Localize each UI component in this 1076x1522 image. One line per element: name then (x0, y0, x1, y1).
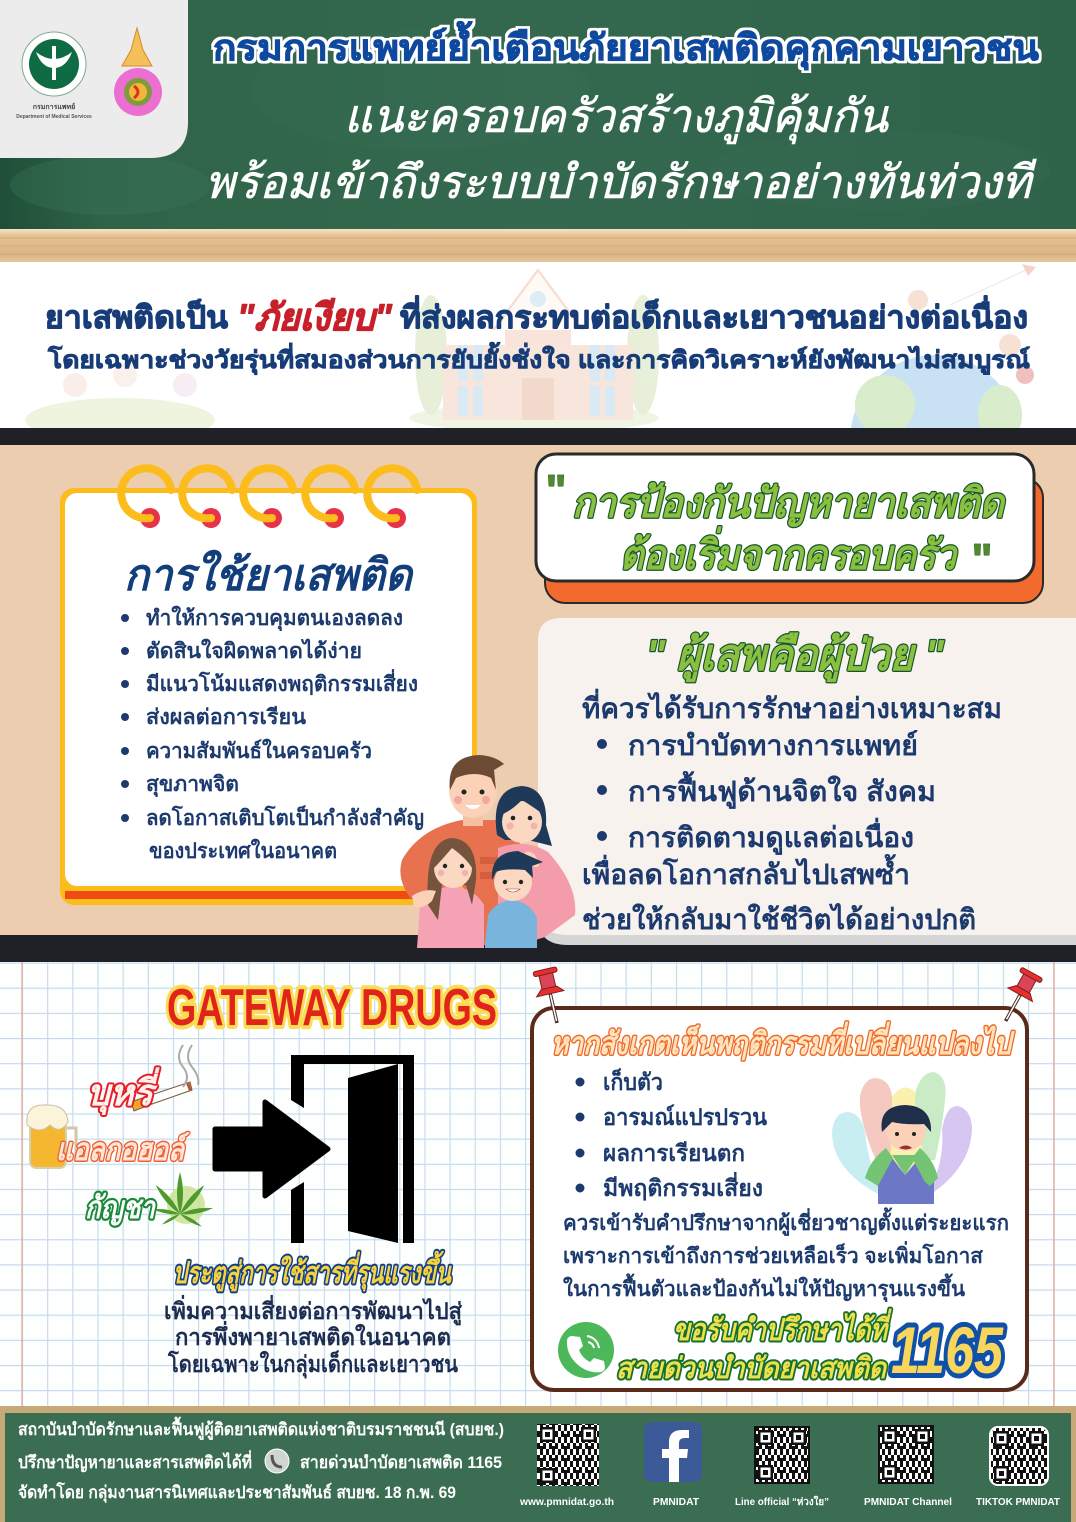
risk text: เพิ่มความเสี่ยงต่อการพัฒนาไปสู่ (164, 1294, 463, 1326)
advice text: ควรเข้ารับคำปรึกษาจากผู้เชี่ยวชาญตั้งแต่ระยะแรก (563, 1207, 1009, 1237)
icon: cannabis and label: กัญชา (85, 1190, 156, 1226)
icon: footer phone (265, 1449, 289, 1473)
intro band (0, 262, 1076, 525)
mother (496, 786, 575, 945)
callout: prevention quote: " (972, 535, 992, 584)
callout: prevention quote: การป้องกันปัญหายาเสพติด (572, 480, 1006, 527)
callout: prevention quote: ต้องเริ่มจากครอบครัว (620, 526, 959, 578)
qr: website (519, 1424, 614, 1508)
wood shelf (0, 229, 1076, 262)
hotline number: 1165 (891, 1313, 1004, 1387)
daughter (412, 838, 484, 948)
patient text (582, 688, 1002, 935)
door caption: ประตูสู่การใช้สารที่รุนแรงขึ้น (173, 1250, 452, 1292)
patient text: การฟื้นฟูด้านจิตใจ สังคม (628, 770, 936, 809)
father (400, 755, 520, 945)
notepad list: ทำให้การควบคุมตนเองลดลง (146, 605, 403, 632)
behaviour list: มีพฤติกรรมเสี่ยง (603, 1171, 763, 1201)
title (205, 21, 1039, 208)
illustration: anxious child (832, 1072, 972, 1204)
notepad list: มีแนวโน้มแสดงพฤติกรรมเสี่ยง (146, 668, 418, 696)
title: แนะครอบครัวสร้างภูมิคุ้มกัน (344, 90, 889, 144)
notepad list: ส่งผลต่อการเรียน (146, 705, 307, 729)
patient text: ช่วยให้กลับมาใช้ชีวิตได้อย่างปกติ (582, 903, 976, 935)
patient text: ที่ควรได้รับการรักษาอย่างเหมาะสม (582, 688, 1002, 724)
intro line 1: ที่ส่งผลกระทบต่อเด็กและเยาวชนอย่างต่อเนื่อง (400, 295, 1028, 335)
icon: cigarette and label (87, 1045, 198, 1115)
qr: tiktok: TIKTOK PMNIDAT (976, 1497, 1060, 1508)
qr: line official (735, 1427, 829, 1508)
qr: tiktok (976, 1427, 1060, 1508)
notepad list: ตัดสินใจผิดพลาดได้ง่าย (146, 638, 362, 663)
panel: behaviour changes: สายด่วนบำบัดยาเสพติด (616, 1353, 888, 1385)
notepad rings (121, 468, 417, 528)
icon: phone (558, 1322, 614, 1378)
footer text (18, 1416, 504, 1503)
intro line 1 (45, 295, 1028, 338)
son (485, 851, 543, 948)
patient heading: " ผู้เสพคือผู้ป่วย " (646, 631, 945, 683)
header chalkboard (0, 0, 1076, 230)
intro line 2: โดยเฉพาะช่วงวัยรุ่นที่สมองส่วนการยับยั้งชั่งใจ และการคิดวิเคราะห์ยังพัฒนาไม่สมบูรณ์ (47, 341, 1030, 376)
logo: thanyarak institute (114, 28, 162, 116)
risk text: การพึ่งพายาเสพติดในอนาคต (175, 1320, 451, 1350)
qr: line official: Line official “ห่วงใย” (735, 1495, 829, 1508)
qr: channel (864, 1426, 952, 1508)
icon: beer and label (27, 1105, 190, 1168)
heading: gateway drugs: GATEWAY DRUGS (167, 979, 497, 1037)
callout: prevention quote (536, 454, 1043, 603)
illustration: family (400, 755, 575, 948)
icon: beer and label: แอลกอฮอล์ (56, 1132, 190, 1167)
advice text: เพราะการเข้าถึงการช่วยเหลือเร็ว จะเพิ่มโอกาส (563, 1240, 983, 1268)
logo: ministry of public health: กรมการแพทย์ (33, 102, 75, 111)
icon: left pin (531, 966, 571, 1026)
footer (0, 1406, 1076, 1522)
notepad list: สุขภาพจิต (146, 773, 239, 798)
advice text (563, 1207, 1009, 1303)
footer text: สถาบันบำบัดรักษาและฟื้นฟูผู้ติดยาเสพติดแห่งชาติบรมราชชนนี (สบยช.) (18, 1416, 504, 1441)
behaviour list: ผลการเรียนตก (603, 1140, 745, 1166)
logo: ministry of public health (16, 32, 92, 120)
notepad heading: การใช้ยาเสพติด (124, 549, 414, 600)
grid paper section (0, 962, 1076, 1406)
panel: drug use notepad (60, 468, 477, 905)
logo panel (0, 0, 188, 158)
icon: facebook (644, 1422, 702, 1508)
behaviour list (576, 1067, 767, 1201)
icon: right pin (993, 966, 1045, 1028)
icon: facebook: PMNIDAT (653, 1497, 699, 1508)
panel: behaviour changes (531, 966, 1045, 1390)
intro line 1: "ภัยเงียบ" (237, 297, 392, 338)
footer text: จัดทำโดย กลุ่มงานสารนิเทศและประชาสัมพันธ์ สบยช. 18 ก.พ. 69 (18, 1482, 456, 1503)
behaviour list: อารมณ์แปรปรวน (603, 1104, 767, 1130)
intro line 1: ยาเสพติดเป็น (45, 298, 228, 335)
qr: channel: PMNIDAT Channel (864, 1497, 952, 1508)
icon: cannabis and label (85, 1172, 214, 1228)
hotline text: ขอรับคำปรึกษาได้ที่ (673, 1308, 892, 1347)
footer text: สายด่วนบำบัดยาเสพติด 1165 (300, 1453, 502, 1472)
patient text: การบำบัดทางการแพทย์ (628, 730, 918, 761)
callout: prevention quote: " (546, 466, 566, 515)
patient text: การติดตามดูแลต่อเนื่อง (628, 817, 914, 855)
notepad list: ของประเทศในอนาคต (149, 838, 337, 863)
icon: cigarette and label: บุหรี่ (87, 1067, 160, 1115)
qr: website: www.pmnidat.go.th (519, 1497, 614, 1508)
faded school illustration (25, 264, 1036, 525)
title: พร้อมเข้าถึงระบบบำบัดรักษาอย่างทันท่วงที (205, 156, 1037, 208)
peach section with dark bands (0, 428, 1076, 962)
notepad list (121, 605, 424, 863)
notepad list: ลดโอกาสเติบโตเป็นกำลังสำคัญ (146, 804, 424, 831)
logo: ministry of public health: Department of Medical Services (16, 114, 92, 120)
advice text: ในการฟื้นตัวและป้องกันไม่ให้ปัญหารุนแรงขึ้น (563, 1273, 966, 1303)
icon: door with arrow (215, 1055, 414, 1243)
title: กรมการแพทย์ย้ำเตือนภัยยาเสพติดคุกคามเยาวชน (213, 21, 1039, 71)
patient text: เพื่อลดโอกาสกลับไปเสพซ้ำ (582, 853, 910, 890)
behaviour list: เก็บตัว (603, 1067, 663, 1095)
risk text: โดยเฉพาะในกลุ่มเด็กและเยาวชน (167, 1349, 458, 1379)
notepad list: ความสัมพันธ์ในครอบครัว (146, 738, 372, 763)
footer text: ปรึกษาปัญหายาและสารเสพติดได้ที่ (18, 1450, 252, 1473)
panel: patients need treatment (538, 618, 1076, 945)
risk text (164, 1294, 463, 1379)
